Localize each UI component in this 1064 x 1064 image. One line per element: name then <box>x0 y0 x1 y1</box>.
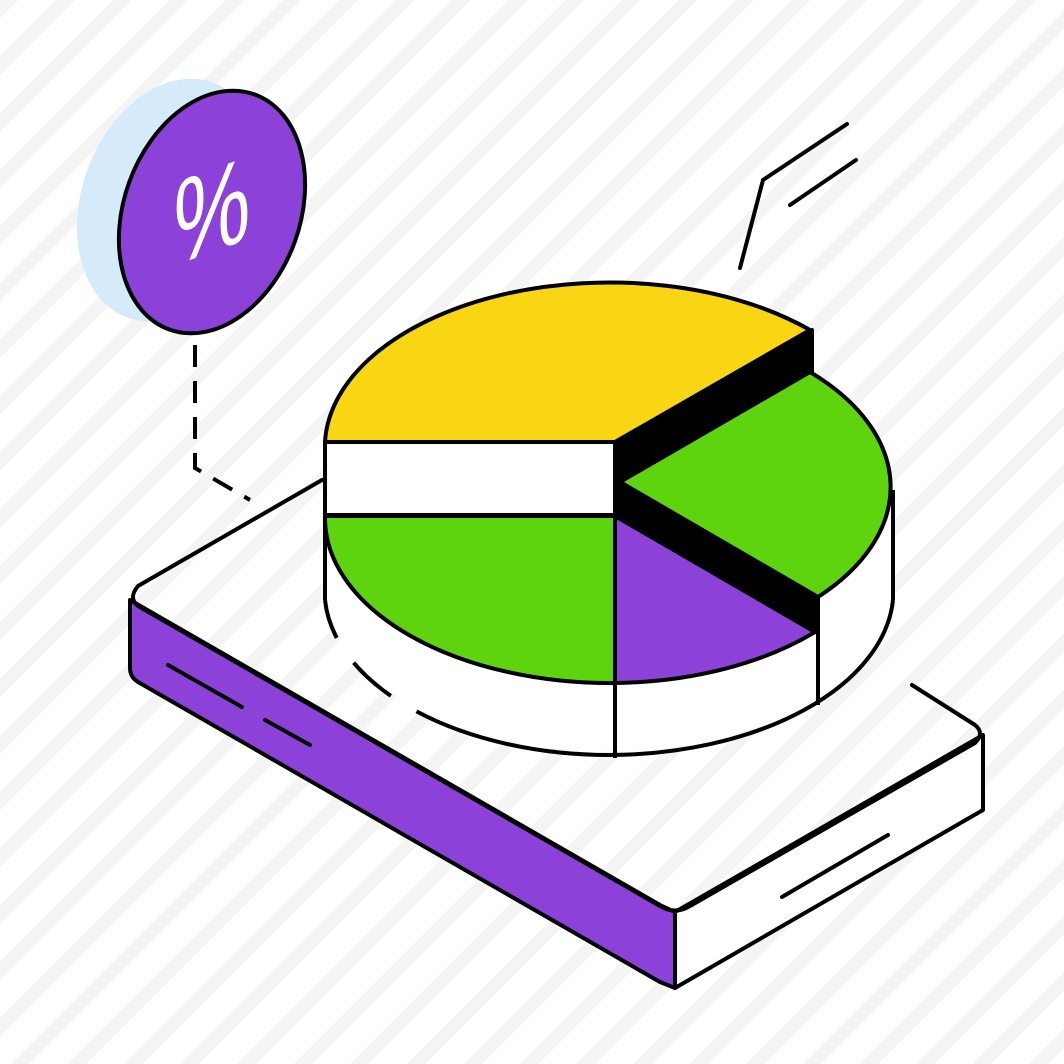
sparkle lines <box>740 124 856 268</box>
pie chart <box>325 282 893 758</box>
black bands <box>615 330 818 632</box>
coin: percent <box>45 52 337 360</box>
dashed connector <box>195 345 250 500</box>
coin: percent: % <box>174 129 250 292</box>
platform <box>130 480 983 988</box>
slice: yellow <box>325 282 810 442</box>
slice: lower green <box>325 516 615 683</box>
slice: right green <box>620 372 891 597</box>
white block <box>325 442 615 515</box>
slice: purple <box>615 516 815 683</box>
